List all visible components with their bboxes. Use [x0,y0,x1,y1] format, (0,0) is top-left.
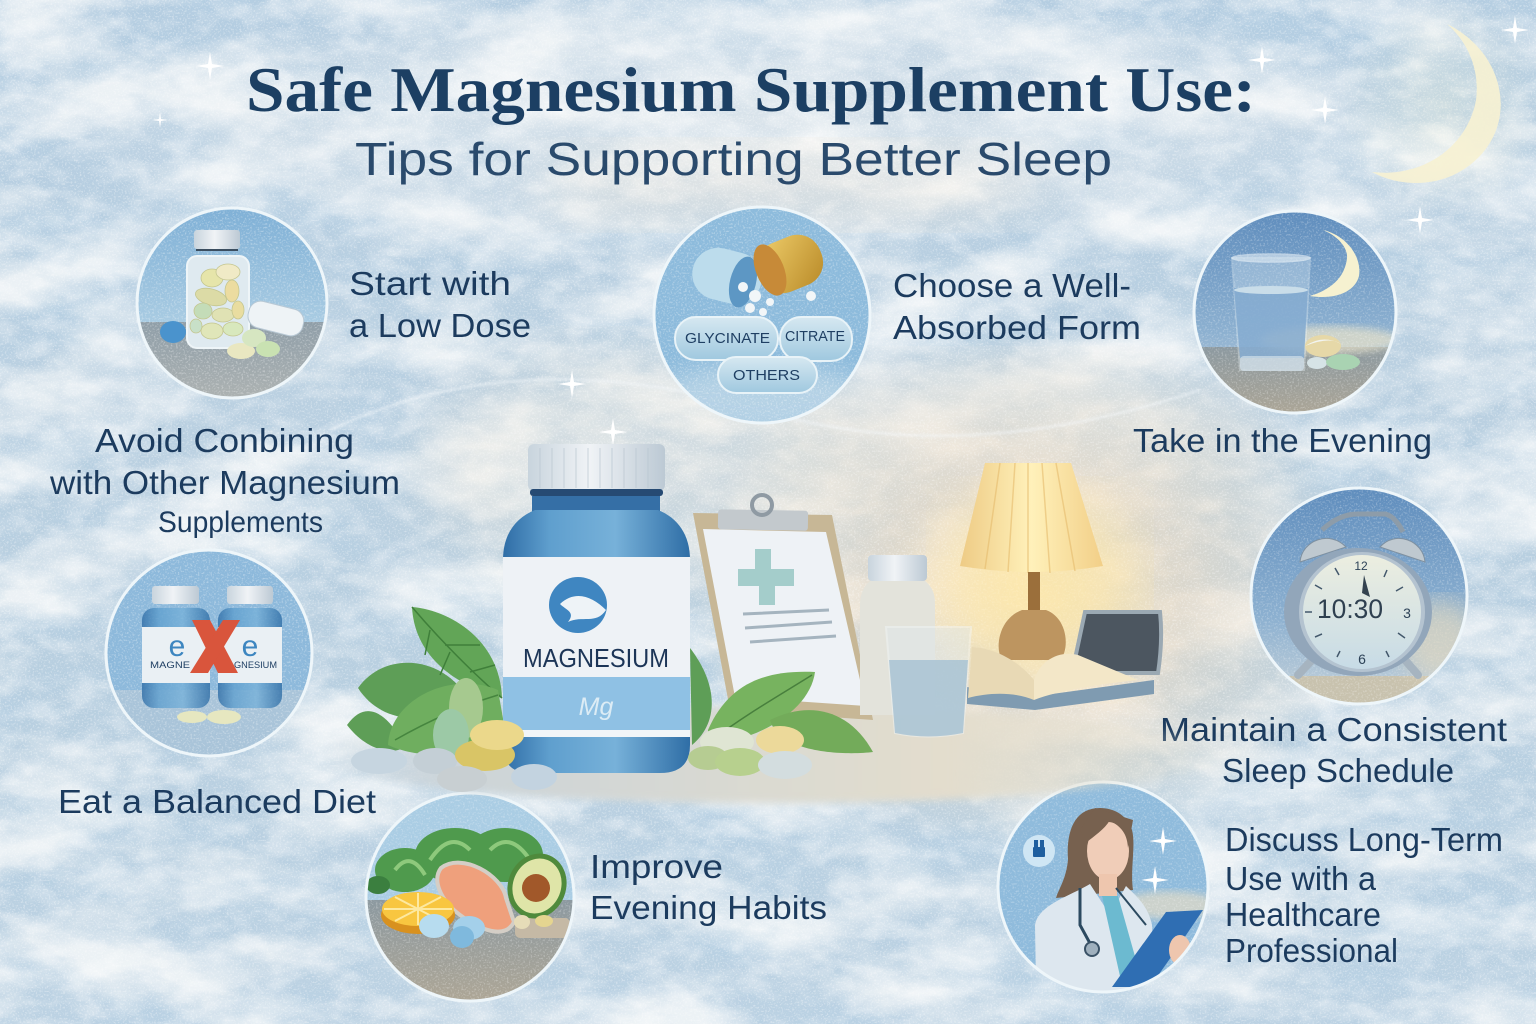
bottle name right: GNESIUM [234,660,277,670]
clipboard with medical cross [693,495,873,720]
label: discuss long-term use: Use with a [1225,860,1377,897]
icon: glass of water and moon [1190,208,1400,418]
label [349,265,531,344]
clock time: 10:30 [1317,594,1383,624]
tablets left [351,720,557,792]
label: consistent sleep schedule: Maintain a Consistent [1160,711,1507,748]
bottle symbol: Mg [579,693,613,721]
clock numeral 3: 3 [1403,605,1411,621]
bottle letter right: e [242,630,258,663]
label: consistent sleep schedule: Sleep Schedule [1222,752,1454,789]
icon: healthcare professional [995,780,1220,995]
crescent moon [1335,0,1536,215]
central scene: supplements on a bedside table [320,444,1220,803]
label: discuss long-term use: Professional [1225,932,1398,969]
icon: alarm clock [1250,488,1480,716]
label: Eat a Balanced Diet [58,783,376,820]
icon: pill bottle [136,206,328,400]
label: a Low Dose [349,307,531,344]
label: improve evening habits [590,848,827,926]
tip: take in the evening [1133,208,1432,459]
bottle logo [549,577,607,633]
pill text: citrate: CITRATE [785,328,845,345]
icon: open capsule with form pills [650,205,875,436]
title [246,55,1256,185]
leaves [347,607,873,761]
tip: choose a well-absorbed form [650,205,1141,436]
tablet [1072,612,1161,673]
icon: balanced food plate [360,790,580,1001]
clock numeral 6: 6 [1358,651,1366,667]
pill text: glycinate: GLYCINATE [685,330,770,347]
bottle name left: MAGNE [150,660,190,670]
label: Supplements [158,506,323,539]
pill text: others: OTHERS [733,367,800,384]
label: Avoid Conbining [95,422,354,459]
label: discuss long-term use: Discuss Long-Term [1225,821,1503,858]
label: improve evening habits: Improve [590,848,723,885]
label: improve evening habits: Evening Habits [590,889,827,926]
tip: avoid combining [49,422,400,820]
table surface [320,707,1220,803]
icon: two bottles with red X [100,550,320,760]
decorative stars [152,16,1529,446]
label: consistent sleep schedule [1160,711,1507,789]
main heading: Safe Magnesium Supplement Use: [246,55,1256,125]
subtitle: Tips for Supporting Better Sleep [355,133,1112,185]
label [893,267,1141,346]
lamp [945,463,1135,685]
label: Start with [349,265,511,302]
open book [967,647,1154,710]
label: discuss long-term use: Healthcare [1225,896,1381,933]
small white bottle [860,555,935,715]
label [49,422,400,539]
bottle name: MAGNESIUM [523,643,669,673]
label: Absorbed Form [893,309,1141,346]
label: Take in the Evening [1133,422,1432,459]
label: with Other Magnesium [49,464,400,501]
bottle letter left: e [169,630,185,663]
clock numeral 12: 12 [1354,559,1368,573]
tip: start with a low dose [130,200,531,402]
label: Choose a Well- [893,267,1131,304]
main magnesium bottle [503,444,690,773]
tablets right [688,726,812,779]
label: discuss long-term use [1225,821,1503,969]
glass of water [886,627,971,736]
